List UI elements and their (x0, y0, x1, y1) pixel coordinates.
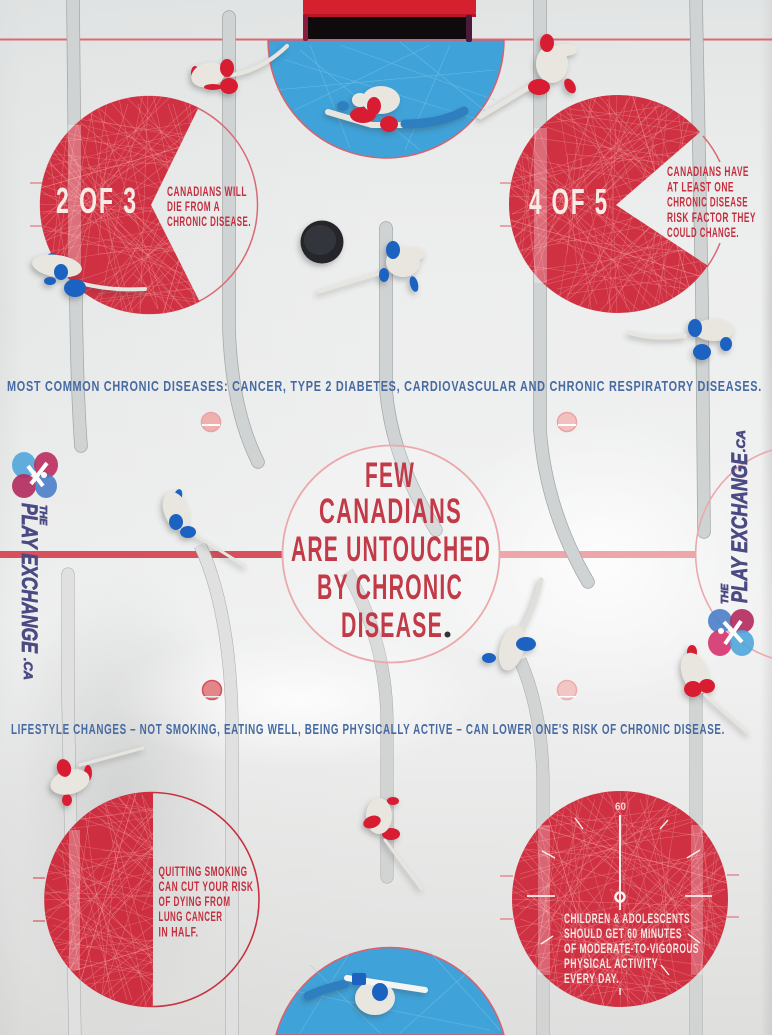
caption: quitting smoking: CAN CUT YOUR RISK (158, 878, 254, 894)
logo right: The Play Exchange (708, 430, 754, 656)
player: red lower right (676, 645, 748, 733)
player: blue lower centre (482, 580, 541, 673)
caption: quitting smoking: LUNG CANCER (158, 908, 222, 924)
player: blue left defender (31, 252, 145, 297)
caption: canadians will die: CHRONIC DISEASE. (167, 213, 251, 229)
caption: quitting smoking: QUITTING SMOKING (158, 863, 248, 879)
stat: 4 of 5: 4 OF 5 (529, 181, 609, 222)
clock chart: 60 minutes (500, 791, 739, 1007)
puck (300, 220, 344, 264)
wordmark: PLAY EXCHANGE (727, 452, 752, 603)
centre circle heading: BY CHRONIC (317, 568, 463, 607)
player: blue midfield (158, 488, 245, 566)
wordmark: PLAY EXCHANGE (17, 503, 42, 654)
player: red lower centre (361, 797, 421, 888)
logo mark (12, 452, 58, 498)
logo left: The Play Exchange (12, 452, 58, 680)
caption: canadians have risk factor (667, 163, 756, 240)
centre circle heading: DISEASE (341, 606, 443, 645)
face-off dots (202, 412, 576, 700)
player: red left wing (188, 46, 287, 94)
pie chart: 4 of 5 (500, 95, 756, 313)
player: red lower left (48, 748, 143, 806)
player: blue goalie (308, 973, 425, 1015)
clock label: 60: 60 (615, 801, 626, 813)
pie chart: half (33, 792, 260, 1007)
caption: canadians will die: CANADIANS WILL (167, 183, 247, 199)
centre circle heading: ARE UNTOUCHED (291, 530, 491, 569)
stat: 2 of 3: 2 OF 3 (56, 180, 138, 221)
caption: children and adolescents: CHILDREN & ADOLESCENTS (564, 910, 690, 926)
caption: children and adolescents: PHYSICAL ACTIVITY (564, 955, 658, 971)
player: blue centre (319, 241, 425, 293)
wordmark: THE (37, 505, 48, 525)
caption: quitting smoking: IN HALF. (158, 924, 198, 940)
caption: canadians will die: DIE FROM A (167, 198, 220, 214)
wordmark: .CA (734, 430, 748, 452)
wordmark: .CA (21, 658, 35, 680)
caption: quitting smoking: OF DYING FROM (158, 893, 230, 909)
player: red goalie (328, 86, 464, 132)
goal net (303, 0, 476, 42)
caption: children and adolescents: SHOULD GET 60 MINUTES (564, 925, 682, 941)
wordmark: THE (720, 584, 731, 604)
caption: quitting smoking (158, 863, 254, 940)
logo mark (708, 609, 754, 656)
centre circle heading: FEW (365, 456, 415, 495)
top goal crease (268, 40, 504, 158)
player: red right wing (480, 34, 578, 117)
pie chart: 2 of 3 (30, 96, 258, 314)
caption: canadians will die (167, 183, 251, 229)
clock face ticks and hand (527, 815, 712, 995)
centre circle heading (282, 446, 772, 662)
bottom goal crease (276, 947, 504, 1035)
caption: children and adolescents (564, 910, 699, 986)
player: blue right defender (630, 319, 734, 360)
caption: children and adolescents: EVERY DAY. (564, 970, 619, 986)
rink lines (0, 38, 772, 558)
centre circle heading: CANADIANS (319, 492, 462, 531)
